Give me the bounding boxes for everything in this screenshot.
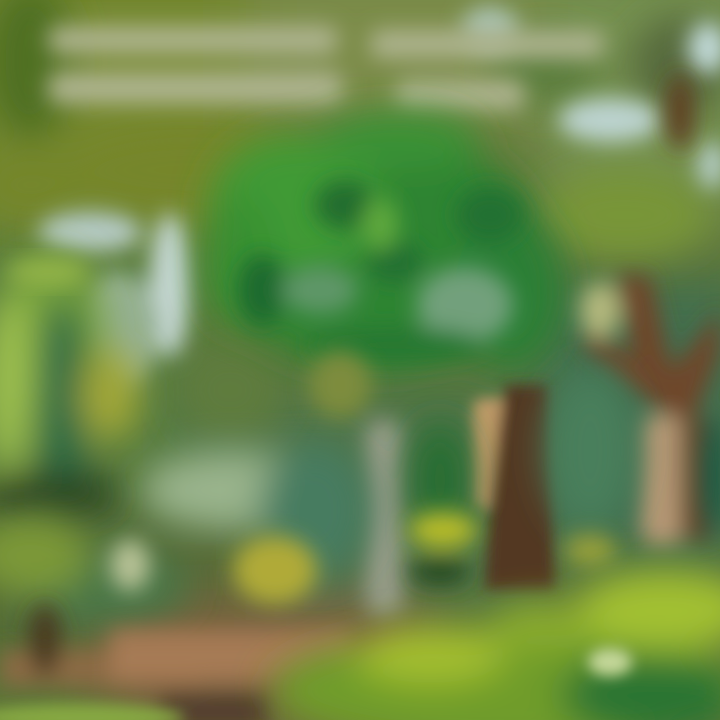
foreground bright hedge xyxy=(0,570,720,720)
sky patches xyxy=(38,6,720,388)
left shrub xyxy=(0,255,140,519)
blurred title band xyxy=(48,26,605,110)
ground path xyxy=(0,604,350,720)
right tree trunk xyxy=(472,385,555,590)
central tree canopy xyxy=(204,112,565,370)
far right branching tree xyxy=(580,74,720,545)
middle shrubs xyxy=(0,370,635,627)
central tree trunk xyxy=(308,351,403,615)
